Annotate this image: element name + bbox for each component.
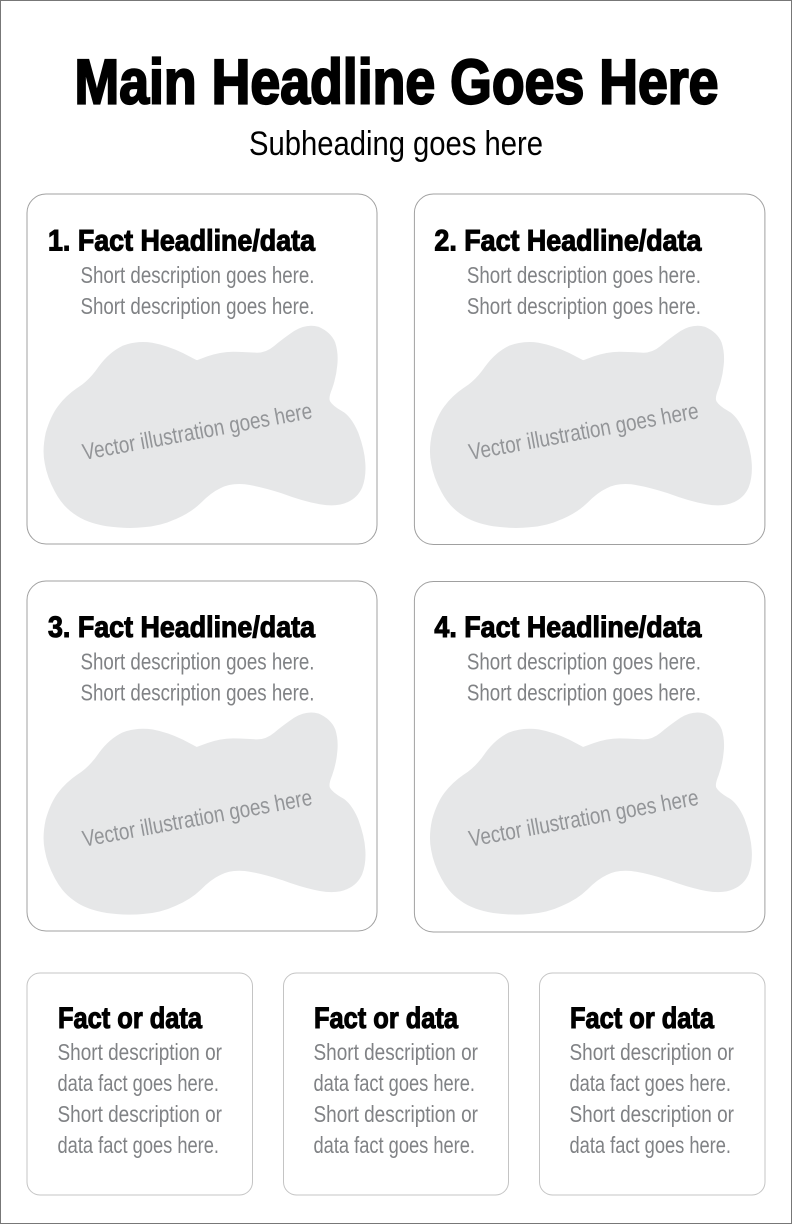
- card 3 outline: [27, 581, 377, 931]
- card 4 heading: 4. Fact Headline/data: [434, 611, 702, 644]
- small card 1 heading: Fact or data: [58, 1002, 202, 1035]
- card 4 description: [467, 649, 701, 706]
- card 4 illustration placeholder: Vector illustration goes here: [467, 784, 700, 852]
- small card 3 description: data fact goes here.: [570, 1132, 731, 1158]
- card 2 description: Short description goes here.: [467, 262, 701, 288]
- small card 3 description: Short description or: [570, 1101, 734, 1127]
- card 2 outline: [414, 194, 765, 544]
- card 3 description: Short description goes here.: [80, 649, 314, 675]
- card 3 illustration placeholder: [45, 714, 364, 913]
- panel: small fact 1: [27, 973, 252, 1195]
- small card 2 description: [314, 1039, 478, 1158]
- panel: fact 2: [414, 194, 765, 544]
- panel: fact 3: [27, 581, 377, 931]
- small card 1 description: Short description or: [58, 1039, 222, 1065]
- small card 3 heading: Fact or data: [570, 1002, 714, 1035]
- small card 2 heading: Fact or data: [314, 1002, 458, 1035]
- small card 3 description: [570, 1039, 734, 1158]
- small card 2 description: data fact goes here.: [314, 1070, 475, 1096]
- panel: small fact 3: [540, 973, 765, 1195]
- small card 3 description: Short description or: [570, 1039, 734, 1065]
- small card 2 description: Short description or: [314, 1039, 478, 1065]
- card 2 illustration placeholder: [431, 327, 751, 527]
- card 4 outline: [414, 582, 765, 932]
- panel: fact 1: [27, 194, 377, 544]
- small card 2 description: Short description or: [314, 1101, 478, 1127]
- card 3 description: Short description goes here.: [80, 680, 314, 706]
- small card 3 outline: [540, 973, 765, 1195]
- small card 1 description: [58, 1039, 222, 1158]
- card 1 illustration placeholder: Vector illustration goes here: [80, 397, 314, 465]
- panel: small fact 2: [284, 973, 508, 1195]
- card 3 heading: 3. Fact Headline/data: [48, 611, 315, 644]
- card 2 heading: 2. Fact Headline/data: [434, 224, 702, 258]
- card 1 description: [80, 262, 314, 319]
- card 3 illustration placeholder: Vector illustration goes here: [80, 784, 314, 852]
- card 4 description: Short description goes here.: [467, 649, 701, 675]
- card 4 illustration placeholder: [431, 714, 751, 913]
- small card 2 description: data fact goes here.: [314, 1132, 475, 1158]
- small card 3 description: data fact goes here.: [570, 1070, 731, 1096]
- card 4 description: Short description goes here.: [467, 680, 701, 706]
- small card 1 outline: [27, 973, 252, 1195]
- card 1 illustration placeholder: [45, 327, 364, 527]
- small card 1 description: data fact goes here.: [58, 1132, 219, 1158]
- card 3 description: [80, 649, 314, 706]
- small card 1 description: Short description or: [58, 1101, 222, 1127]
- panel: fact 4: [414, 582, 765, 932]
- card 2 illustration placeholder: Vector illustration goes here: [467, 397, 700, 465]
- card 2 description: Short description goes here.: [467, 293, 701, 319]
- small card 1 description: data fact goes here.: [58, 1070, 219, 1096]
- small card 2 outline: [284, 973, 508, 1195]
- card 1 outline: [27, 194, 377, 544]
- card 1 heading: 1. Fact Headline/data: [48, 224, 315, 258]
- subheading: Subheading goes here: [249, 125, 543, 163]
- card 2 description: [467, 262, 701, 319]
- card 1 description: Short description goes here.: [80, 293, 314, 319]
- card 1 description: Short description goes here.: [80, 262, 314, 288]
